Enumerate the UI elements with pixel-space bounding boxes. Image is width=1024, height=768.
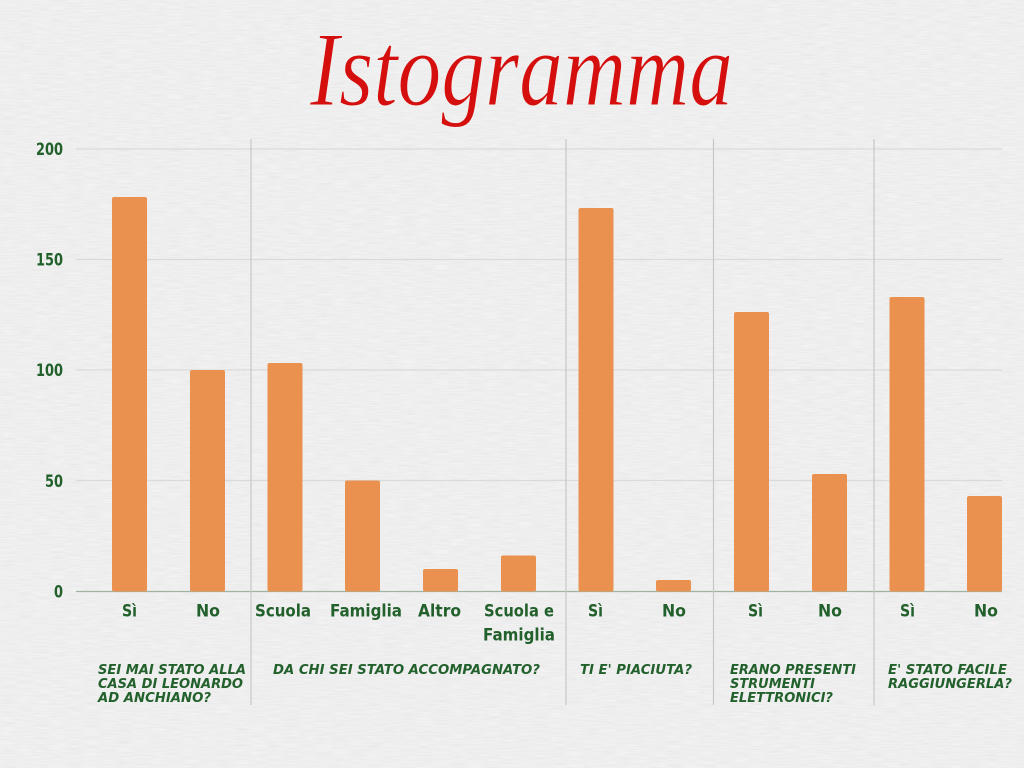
x axis labels: Sì (748, 602, 763, 620)
y axis labels: 200 (36, 140, 63, 159)
question: Facile raggiungerla (888, 662, 1012, 692)
title: Istogramma (309, 11, 733, 128)
y axis labels: 0 (54, 582, 63, 602)
question: Strumenti elettronici (730, 662, 856, 706)
x axis labels (122, 602, 998, 644)
x axis labels: Famiglia (483, 626, 555, 644)
x axis labels: Sì (122, 602, 137, 620)
question: Da chi: DA CHI SEI STATO ACCOMPAGNATO? (273, 662, 540, 678)
question: Piaciuta: TI E' PIACIUTA? (580, 662, 692, 678)
question: Sei mai stato: CASA DI LEONARDO (98, 676, 243, 692)
x axis labels: No (662, 602, 686, 620)
question: Strumenti elettronici: ELETTRONICI? (730, 690, 833, 706)
x axis labels: Scuola e (484, 602, 554, 620)
x axis labels: Scuola (255, 602, 311, 620)
question: Strumenti elettronici: STRUMENTI (730, 676, 815, 692)
question: Sei mai stato: AD ANCHIANO? (97, 690, 211, 706)
question: Sei mai stato: SEI MAI STATO ALLA (98, 662, 246, 678)
y axis labels: 100 (36, 361, 63, 380)
x axis labels: No (196, 602, 220, 620)
question: Strumenti elettronici: ERANO PRESENTI (730, 662, 856, 678)
question: Sei mai stato (97, 662, 246, 706)
x axis labels: Famiglia (330, 602, 402, 620)
y axis labels (36, 140, 63, 602)
x axis labels: Sì (588, 602, 603, 620)
y axis labels: 150 (36, 250, 63, 270)
x axis labels: Altro (418, 602, 461, 620)
bars (112, 197, 1002, 592)
question: Facile raggiungerla: E' STATO FACILE (888, 662, 1008, 678)
bar chart (36, 139, 1002, 705)
x axis labels: No (818, 602, 842, 620)
question: Facile raggiungerla: RAGGIUNGERLA? (888, 676, 1012, 692)
x axis labels: No (974, 602, 998, 620)
y axis labels: 50 (45, 472, 63, 491)
x axis labels: Sì (900, 602, 915, 620)
